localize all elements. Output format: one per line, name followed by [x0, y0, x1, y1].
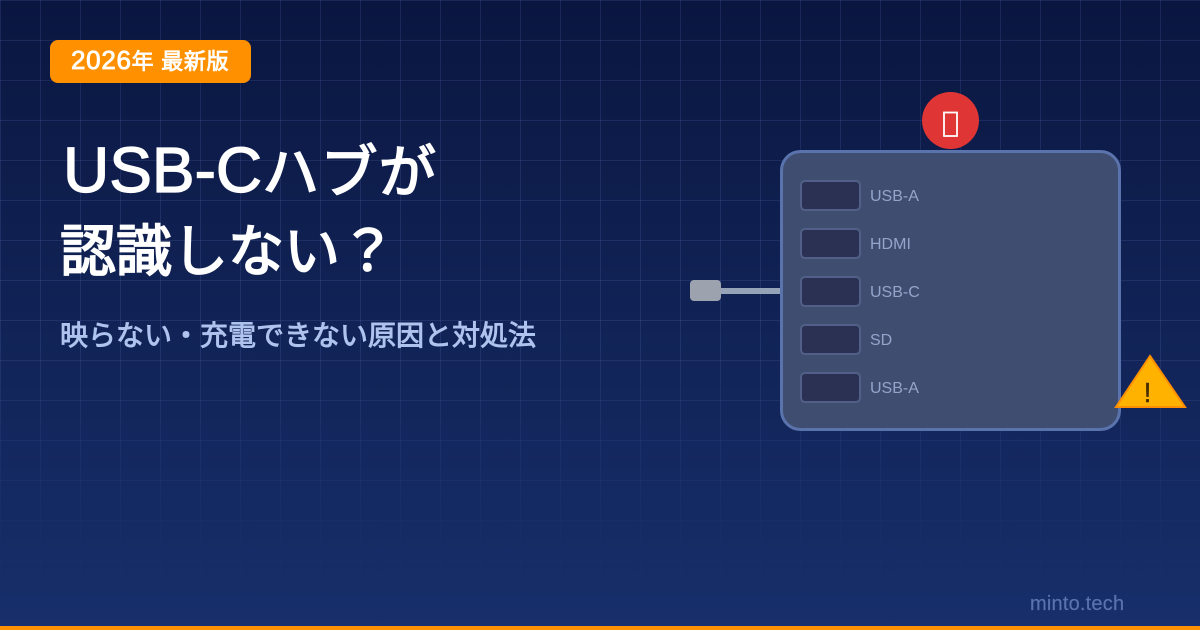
title — [60, 134, 437, 283]
badge: 2026 edition — [50, 40, 251, 83]
port: USB-C — [801, 277, 920, 306]
subtitle: 映らない・充電できない原因と対処法 — [60, 320, 536, 351]
port: SD — [801, 325, 892, 354]
port: HDMI — [801, 229, 911, 258]
port: USB-A: USB-A — [870, 380, 919, 397]
plug — [690, 280, 721, 301]
cable — [720, 288, 781, 294]
badge: 2026 edition: 2026年 最新版 — [71, 45, 229, 75]
port: USB-A — [801, 373, 919, 402]
port: HDMI: HDMI — [870, 236, 911, 253]
port: USB-C: USB-C — [870, 284, 920, 301]
brand: minto.tech — [1030, 593, 1124, 615]
hub body — [782, 152, 1120, 430]
port: USB-A: USB-A — [870, 188, 919, 205]
icon: red status badge — [922, 92, 979, 149]
title: 認識しない？ — [60, 220, 396, 283]
icon: warning triangle: ! — [1144, 377, 1151, 408]
port: USB-A — [801, 181, 919, 210]
icon: warning triangle — [1116, 356, 1185, 408]
port: SD: SD — [870, 332, 892, 349]
title: USB-Cハブが — [63, 134, 437, 206]
